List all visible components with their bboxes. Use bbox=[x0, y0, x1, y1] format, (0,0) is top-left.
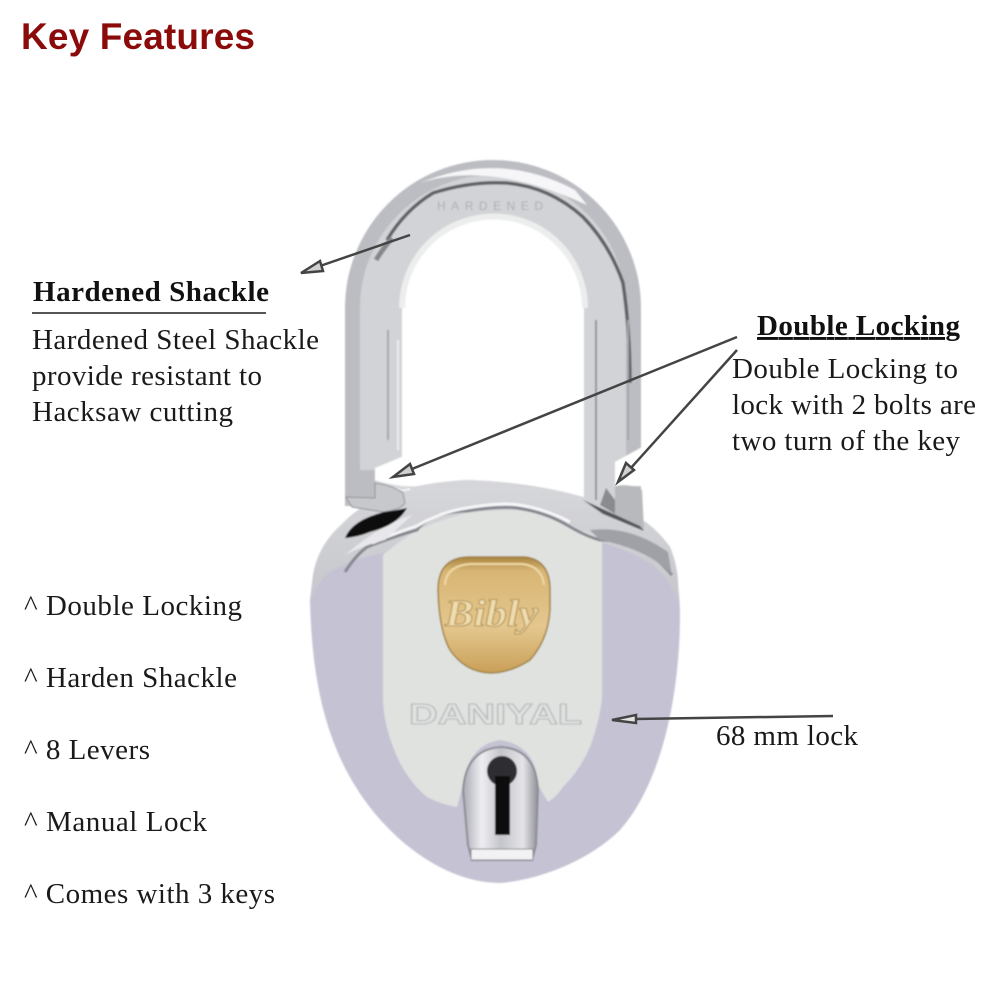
description: hardened shackle bbox=[32, 324, 319, 428]
left shoulder patch bbox=[375, 480, 420, 490]
chrome ridge bbox=[345, 507, 672, 575]
description: double locking: Double Locking to bbox=[732, 353, 958, 385]
callout: hardened shackle bbox=[32, 276, 319, 428]
feature list: ^ Double Locking bbox=[24, 590, 242, 622]
heading: hardened shackle: Hardened Shackle bbox=[33, 276, 269, 308]
notch left bbox=[375, 456, 410, 491]
description: hardened shackle: provide resistant to bbox=[32, 360, 262, 392]
brand name: DANIYAL bbox=[409, 699, 582, 731]
left foot bbox=[346, 483, 405, 512]
shackle bbox=[345, 168, 644, 538]
title: Key Features bbox=[21, 16, 255, 57]
feature list bbox=[24, 590, 275, 910]
right body shine bbox=[590, 529, 672, 575]
body silhouette bbox=[310, 480, 680, 883]
description: double locking bbox=[732, 353, 976, 457]
left body shine bbox=[345, 515, 412, 555]
callout: double locking bbox=[732, 310, 976, 457]
heading: double locking: Double Locking bbox=[757, 310, 960, 342]
description: double locking: lock with 2 bolts are bbox=[732, 389, 976, 421]
keyhole plate bbox=[463, 747, 538, 860]
description: hardened shackle: Hardened Steel Shackle bbox=[32, 324, 319, 356]
lock body bbox=[310, 480, 680, 883]
arrow: double locking right bolt bbox=[618, 350, 737, 482]
notch right bbox=[615, 446, 644, 486]
feature list: ^ Manual Lock bbox=[24, 806, 208, 838]
hole bbox=[345, 508, 407, 538]
feature list: ^ Harden Shackle bbox=[24, 662, 237, 694]
heading underline bbox=[32, 312, 266, 314]
padlock illustration bbox=[310, 168, 680, 883]
top shoulder bbox=[311, 480, 678, 600]
arrow: double locking left bolt bbox=[393, 337, 737, 477]
right post bbox=[615, 485, 644, 530]
arrow: hardened shackle bbox=[301, 235, 410, 273]
gold badge: Bibly bbox=[444, 593, 538, 635]
shackle engraved word: HARDENED bbox=[437, 199, 543, 213]
centre plate bbox=[383, 510, 602, 807]
description: hardened shackle: Hacksaw cutting bbox=[32, 396, 233, 428]
gold badge bbox=[438, 557, 550, 673]
description: double locking: two turn of the key bbox=[732, 425, 960, 457]
feature list: ^ 8 Levers bbox=[24, 734, 150, 766]
size label: 68 mm lock bbox=[716, 720, 858, 752]
arrow: 68 mm lock bbox=[612, 715, 833, 723]
feature list: ^ Comes with 3 keys bbox=[24, 878, 275, 910]
